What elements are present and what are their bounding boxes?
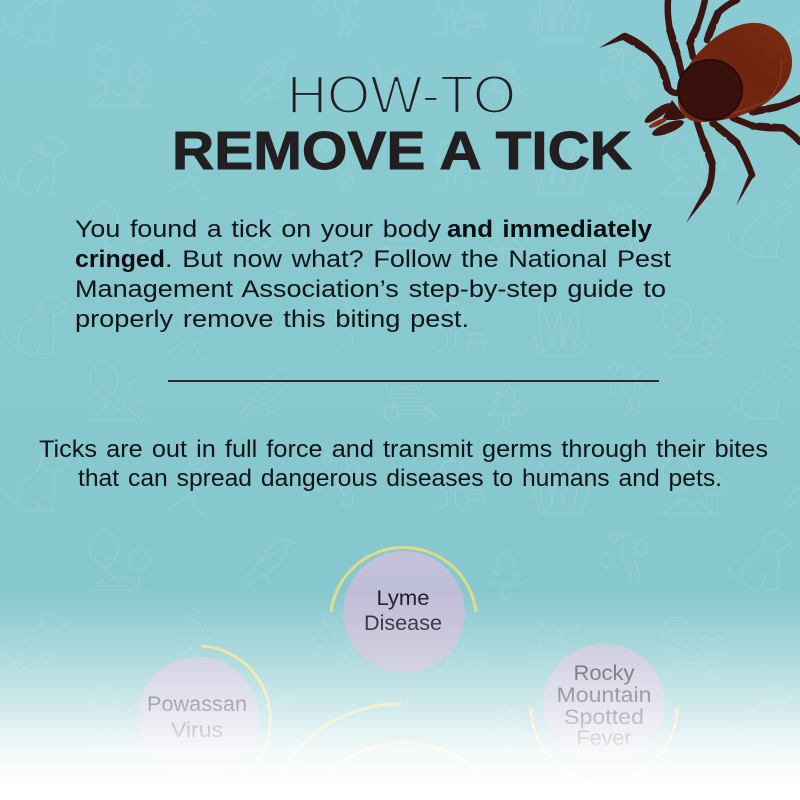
tick abdomen <box>678 23 792 122</box>
tick mouthparts <box>642 100 686 139</box>
disease: Rocky Mountain Spotted Fever: Rocky <box>574 662 635 685</box>
tick legs <box>625 0 800 190</box>
intro paragraph: cringed <box>75 246 165 273</box>
title <box>172 65 632 181</box>
intro paragraph <box>75 216 671 333</box>
tick leg tips <box>599 33 754 223</box>
secondary paragraph: that can spread dangerous diseases to humans and pets. <box>78 465 722 492</box>
title line 1: HOW-TO <box>287 65 516 125</box>
disease: Lyme Disease: Disease <box>364 612 442 635</box>
intro paragraph: and immediately <box>447 216 653 243</box>
disease: Lyme Disease <box>331 548 476 673</box>
tick scutum <box>678 60 742 120</box>
disease: Lyme Disease: Lyme <box>376 587 430 610</box>
disease: Powassan Virus: Powassan <box>147 693 247 716</box>
disease: Powassan Virus: Virus <box>171 719 223 742</box>
illustration: tick <box>599 0 800 223</box>
title line 2: REMOVE A TICK <box>172 121 632 181</box>
secondary paragraph <box>39 436 768 492</box>
intro paragraph: Management Association’s step-by-step guide to <box>75 276 666 303</box>
intro paragraph: . But now what? Follow the National Pest <box>165 246 671 273</box>
bottom arcs <box>272 704 490 790</box>
disease: Rocky Mountain Spotted Fever: Fever <box>576 727 632 750</box>
secondary paragraph: Ticks are out in full force and transmit germs through their bites <box>39 436 768 463</box>
white fade overlay <box>0 590 800 800</box>
disease: Rocky Mountain Spotted Fever: Mountain <box>556 684 652 707</box>
intro paragraph: You found a tick on your body <box>75 216 441 243</box>
disease: Rocky Mountain Spotted Fever: Spotted <box>564 706 644 729</box>
disease: Rocky Mountain Spotted Fever <box>531 644 677 781</box>
disease: Powassan Virus <box>137 646 270 779</box>
intro paragraph: properly remove this biting pest. <box>75 306 469 333</box>
